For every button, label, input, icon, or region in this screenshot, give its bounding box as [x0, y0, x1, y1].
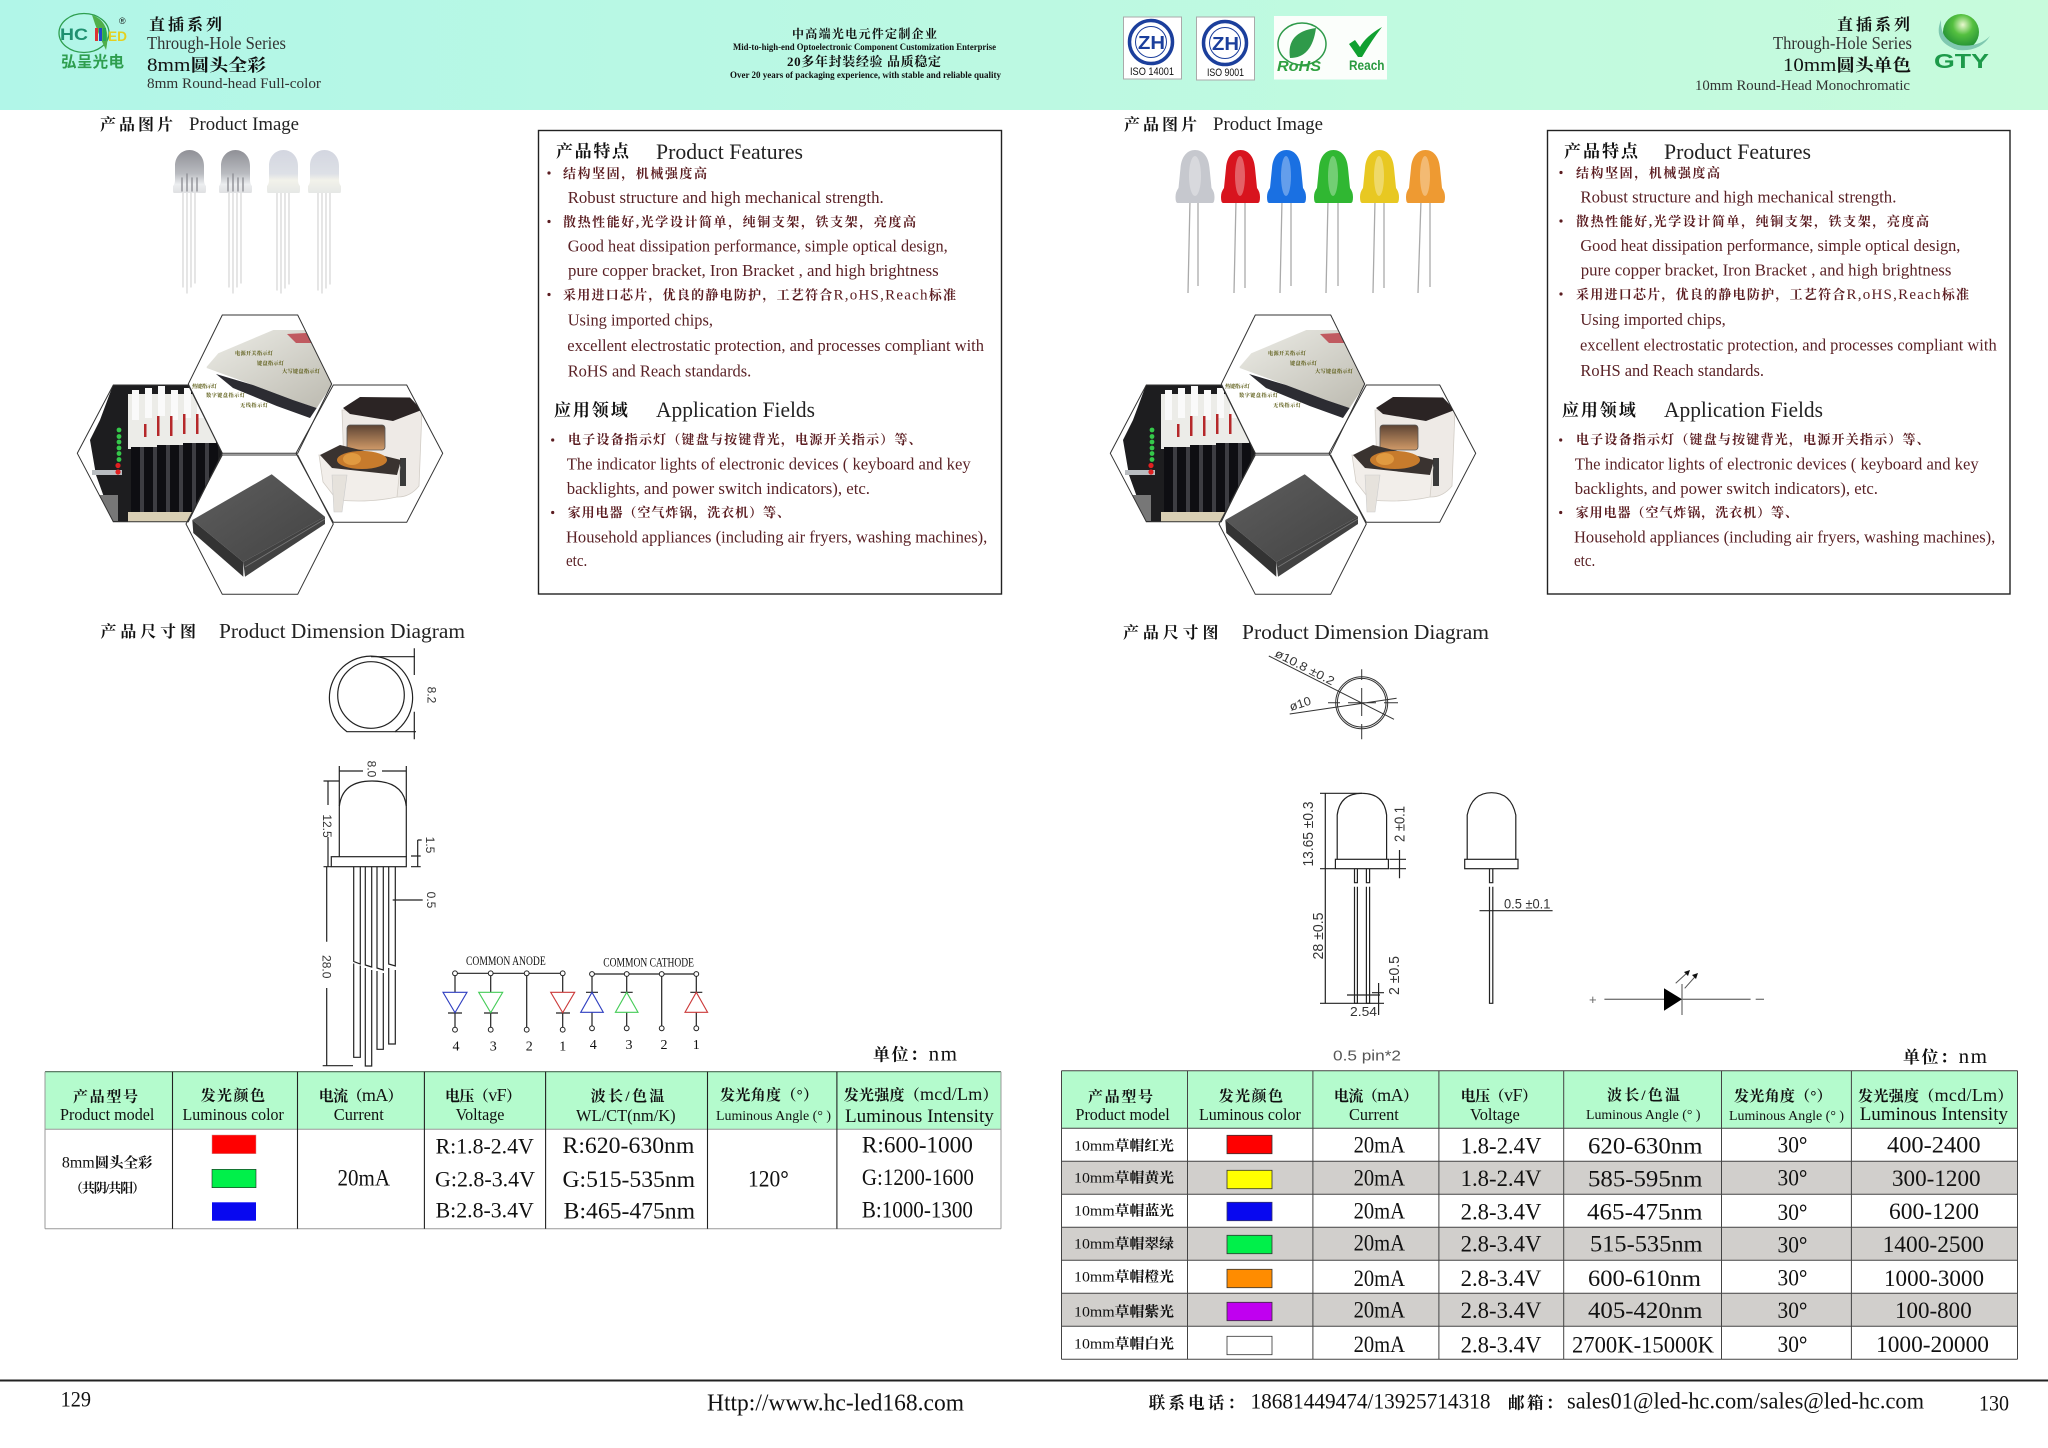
- icon: RoHS and Reach marks: Reach: [1349, 57, 1384, 73]
- icon: ISO 9001 badge: ISO 9001: [1207, 67, 1244, 79]
- table header row: 发光角度（°）: [1734, 1087, 1832, 1105]
- circuit diagram: common cathode: 4: [590, 1038, 597, 1053]
- company slogan: Mid-to-high-end Optoelectronic Component Customization Enterprise: [733, 43, 996, 53]
- row: blue: 600-1200: [1889, 1199, 1979, 1225]
- footer: contact details: 邮箱：: [1508, 1393, 1562, 1412]
- features list: pure copper bracket, Iron Bracket , and high brightness: [568, 261, 939, 280]
- side view: 12.5: [320, 814, 334, 838]
- application hexagon collage right: [1110, 315, 1476, 594]
- side view: 0.5 ±0.1: [1504, 895, 1551, 911]
- company slogan: 中高端光电元件定制企业: [792, 26, 937, 41]
- table header row: [1076, 1085, 2012, 1125]
- row: red: 620-630nm: [1588, 1133, 1702, 1159]
- features list: Robust structure and high mechanical strength.: [1580, 188, 1896, 206]
- footer: contact details: [1149, 1388, 1924, 1413]
- icon: ISO 14001 badge: ISO 14001: [1130, 66, 1174, 78]
- row: red: 400-2400: [1887, 1133, 1981, 1159]
- footer: website: Http://www.hc-led168.com: [707, 1391, 964, 1417]
- features heading: 产品特点: [1564, 141, 1639, 161]
- series title: 直插系列: [149, 15, 222, 34]
- front view: [1300, 793, 1408, 1019]
- device callout labels left: 大写键盘指示灯: [282, 367, 321, 375]
- applications list: 家用电器（空气炸锅，洗衣机）等、: [1576, 505, 1798, 521]
- side view: 8.0: [365, 761, 379, 778]
- icon: HC logo: ®: [119, 16, 126, 26]
- applications heading: [554, 397, 815, 422]
- row: blue: [1074, 1199, 1979, 1226]
- angle value: 120°: [748, 1167, 789, 1193]
- wavelength values: B:465-475nm: [564, 1198, 695, 1224]
- table header row: Luminous Intensity: [845, 1106, 994, 1127]
- table header row: 发光强度（mcd/Lm）: [1858, 1085, 2012, 1105]
- features list: [1559, 166, 1997, 380]
- heading: dimension diagram right: Product Dimension Diagram: [1242, 620, 1489, 644]
- table header row: Luminous Intensity: [1860, 1104, 2008, 1125]
- table header row: Luminous color: [182, 1105, 284, 1124]
- panel: features and applications right: [1548, 130, 2010, 594]
- features heading: 产品特点: [556, 141, 630, 161]
- features list: RoHS and Reach standards.: [1580, 361, 1764, 380]
- row: red: 1.8-2.4V: [1461, 1133, 1542, 1158]
- row: red: 20mA: [1354, 1133, 1405, 1158]
- row: yellow: 585-595nm: [1588, 1166, 1702, 1192]
- footer rule: [0, 1380, 2048, 1382]
- front view: 13.65 ±0.3: [1300, 802, 1317, 866]
- row: white: 2.8-3.4V: [1461, 1332, 1542, 1357]
- features list: 结构坚固，机械强度高: [563, 166, 707, 182]
- table header row: 波长/色温: [591, 1087, 664, 1105]
- intensity values: B:1000-1300: [862, 1198, 973, 1223]
- right page header: [1124, 14, 1990, 94]
- left page header: [59, 14, 1001, 92]
- icon: HC logo: HC: [60, 25, 88, 44]
- features heading: Product Features: [656, 139, 803, 164]
- table: 8mm full-colour specs: [45, 1072, 1001, 1229]
- table header row: 发光颜色: [1219, 1087, 1283, 1105]
- circuit diagram: common cathode: [581, 955, 708, 1053]
- row: blue: 30°: [1778, 1200, 1808, 1226]
- heading: product image left: 产品图片: [100, 115, 173, 134]
- product model: 8mm圆头全彩: [62, 1154, 152, 1171]
- row: red: [1074, 1133, 1981, 1159]
- row: purple: [1074, 1298, 1972, 1324]
- table header row: Current: [334, 1105, 384, 1124]
- series title: [1695, 15, 1912, 94]
- company slogan: [730, 26, 1001, 81]
- unit label right: 单位：nm: [1903, 1044, 1987, 1068]
- row: white: 2700K-15000K: [1572, 1332, 1714, 1358]
- table header row: 产品型号: [73, 1088, 138, 1106]
- circuit diagram: common cathode: COMMON CATHODE: [603, 955, 694, 970]
- intensity values: R:600-1000: [862, 1133, 973, 1158]
- current value: 20mA: [338, 1166, 390, 1191]
- hexagon: air fryer: [296, 385, 443, 522]
- applications list: [551, 432, 987, 570]
- table header row: 发光强度（mcd/Lm）: [844, 1084, 998, 1104]
- table header row: Luminous color: [1199, 1105, 1301, 1124]
- row: white: 1000-20000: [1876, 1332, 1989, 1358]
- row: yellow: 300-1200: [1892, 1166, 1981, 1192]
- table header row: 发光角度（°）: [720, 1086, 818, 1104]
- table header row: Luminous Angle (° ): [1729, 1108, 1844, 1123]
- series title: 10mm Round-Head Monochromatic: [1695, 78, 1910, 94]
- row: orange: 2.8-3.4V: [1461, 1266, 1542, 1291]
- applications list: 电子设备指示灯（键盘与按键背光，电源开关指示）等、: [568, 432, 922, 448]
- dimension drawing: 8mm LED: [320, 648, 439, 1066]
- device callout labels left: 热键指示灯: [192, 382, 218, 390]
- row: orange: [1074, 1266, 1984, 1292]
- icon: HC logo: 弘呈光电: [61, 53, 124, 71]
- applications heading: Application Fields: [1664, 397, 1823, 422]
- icon: RoHS and Reach marks: RoHS: [1277, 58, 1321, 75]
- row: orange: 600-610nm: [1588, 1266, 1701, 1292]
- applications heading: [1562, 397, 1823, 422]
- applications list: etc.: [1574, 551, 1595, 570]
- row: blue: 2.8-3.4V: [1461, 1199, 1542, 1224]
- top view: ø10.8 ±0.2: [1273, 646, 1337, 688]
- device callout labels right: 数字键盘指示灯: [1239, 391, 1279, 399]
- row: emerald green: [1074, 1231, 1984, 1258]
- row: white: 10mm草帽白光: [1074, 1335, 1174, 1352]
- device callout labels left: 数字键盘指示灯: [206, 391, 246, 399]
- features list: [547, 166, 984, 380]
- footer: page number 129: 129: [61, 1387, 91, 1412]
- device callout labels right: [1225, 349, 1354, 409]
- series title: 8mm Round-head Full-color: [147, 76, 321, 92]
- table header row: 电流（mA）: [1334, 1085, 1418, 1105]
- header band: [0, 0, 2048, 110]
- row: yellow: 10mm草帽黄光: [1074, 1170, 1174, 1187]
- table header row: Voltage: [1470, 1105, 1520, 1124]
- row: blue: 10mm草帽蓝光: [1074, 1203, 1174, 1220]
- applications list: 电子设备指示灯（键盘与按键背光，电源开关指示）等、: [1576, 432, 1930, 448]
- circuit diagram: common anode: 2: [526, 1040, 533, 1055]
- features list: pure copper bracket, Iron Bracket , and high brightness: [1581, 260, 1951, 280]
- side view: 0.5: [424, 892, 438, 909]
- circuit diagram: common anode: [443, 953, 575, 1055]
- dimension drawing: 10mm LED: [1269, 646, 1553, 1065]
- features list: excellent electrostatic protection, and processes compliant with: [1580, 336, 1997, 354]
- applications list: Household appliances (including air fryers, washing machines),: [566, 527, 987, 546]
- applications list: [1559, 432, 1995, 570]
- circuit diagram: common anode: 1: [559, 1040, 566, 1055]
- side view: [320, 761, 438, 1066]
- hexagon: server rack: [77, 385, 224, 522]
- table header row: Luminous Angle (° ): [1586, 1107, 1700, 1122]
- features list: Using imported chips,: [1580, 310, 1726, 329]
- heading: dimension diagram left: 产品尺寸图: [100, 622, 196, 641]
- icon: RoHS and Reach marks: [1274, 16, 1387, 80]
- row: emerald green: 2.8-3.4V: [1461, 1232, 1542, 1256]
- footer: contact details: 18681449474/13925714318: [1250, 1388, 1490, 1413]
- photo: four RGB LEDs: [173, 150, 341, 293]
- row: orange: 1000-3000: [1884, 1266, 1984, 1292]
- hexagon: dark box: [186, 455, 333, 594]
- row: blue: 465-475nm: [1587, 1199, 1702, 1225]
- heading: product image left: Product Image: [189, 115, 299, 135]
- row: purple: 100-800: [1895, 1298, 1972, 1324]
- row: orange: 30°: [1778, 1266, 1808, 1292]
- row: orange: 10mm草帽橙光: [1074, 1268, 1174, 1285]
- device callout labels left: 无线指示灯: [240, 401, 269, 409]
- table: 10mm monochrome specs: [1062, 1071, 2018, 1359]
- applications list: etc.: [566, 551, 587, 570]
- features list: excellent electrostatic protection, and processes compliant with: [567, 336, 984, 355]
- heading: product image right: 产品图片: [1124, 115, 1197, 134]
- features list: Good heat dissipation performance, simple optical design,: [1580, 236, 1960, 255]
- features list: RoHS and Reach standards.: [568, 362, 751, 380]
- applications list: 家用电器（空气炸锅，洗衣机）等、: [568, 505, 790, 521]
- table header row: 电压（vF）: [445, 1085, 521, 1105]
- applications list: The indicator lights of electronic devices ( keyboard and key: [1575, 454, 1979, 473]
- series title: 8mm 圆头全彩: [147, 55, 266, 76]
- company slogan: 20多年封装经验 品质稳定: [787, 54, 941, 69]
- front view: 2 ±0.5: [1386, 956, 1403, 995]
- table header row: Current: [1349, 1105, 1399, 1124]
- table header row: Product model: [60, 1105, 155, 1124]
- voltage values: B:2.8-3.4V: [436, 1198, 534, 1223]
- row: purple: 10mm草帽紫光: [1074, 1303, 1174, 1320]
- colour swatches: [212, 1135, 256, 1221]
- table header row: Product model: [1076, 1105, 1170, 1124]
- features list: 散热性能好,光学设计简单，纯铜支架，铁支架，亮度高: [563, 214, 916, 230]
- table header row: 发光颜色: [201, 1086, 265, 1104]
- heading: dimension diagram left: Product Dimension Diagram: [219, 619, 465, 643]
- device callout labels right: 热键指示灯: [1225, 382, 1251, 390]
- row: white: 20mA: [1354, 1332, 1405, 1357]
- row: emerald green: 515-535nm: [1590, 1232, 1702, 1258]
- voltage values: R:1.8-2.4V: [436, 1133, 534, 1158]
- side view: [1465, 793, 1553, 1003]
- row: white: 30°: [1778, 1332, 1808, 1358]
- circuit diagram: common cathode: 1: [693, 1038, 700, 1053]
- applications list: The indicator lights of electronic devices ( keyboard and key: [567, 454, 971, 473]
- icon: HC logo: ED: [108, 28, 127, 44]
- row: red: 10mm草帽红光: [1074, 1138, 1174, 1155]
- table header row: [60, 1084, 998, 1127]
- LED schematic symbol: +: [1589, 992, 1597, 1007]
- series title: 10mm 圆头单色: [1783, 55, 1911, 76]
- heading: dimension diagram right: [1123, 620, 1489, 644]
- table header row: 电压（vF）: [1461, 1085, 1537, 1105]
- circuit diagram: common anode: 3: [490, 1040, 497, 1055]
- heading: dimension diagram left: [100, 619, 465, 643]
- table header row: 产品型号: [1088, 1088, 1153, 1106]
- features list: 采用进口芯片，优良的静电防护，工艺符合R,oHS,Reach标准: [563, 288, 956, 304]
- applications list: backlights, and power switch indicators), etc.: [567, 479, 870, 498]
- footer: contact details: 联系电话：: [1149, 1392, 1244, 1412]
- product model: [62, 1154, 152, 1196]
- voltage values: [435, 1133, 535, 1223]
- panel: features and applications left: [538, 130, 1002, 594]
- features heading: Product Features: [1664, 139, 1811, 164]
- row: emerald green: 1400-2500: [1883, 1232, 1984, 1258]
- device callout labels right: 大写键盘指示灯: [1315, 367, 1354, 375]
- circuit diagram: common cathode: 3: [626, 1038, 632, 1053]
- icon: ISO 14001 badge: ZH: [1138, 33, 1165, 53]
- table header row: 电流（mA）: [319, 1085, 402, 1105]
- device callout labels right: 键盘指示灯: [1290, 359, 1318, 367]
- top view: [329, 648, 439, 739]
- applications list: Household appliances (including air fryers, washing machines),: [1574, 527, 1995, 546]
- top view: 8.2: [425, 687, 439, 704]
- features list: 散热性能好,光学设计简单，纯铜支架，铁支架，亮度高: [1576, 214, 1929, 230]
- unit label left: 单位：nm: [873, 1042, 957, 1066]
- row: red: 30°: [1778, 1133, 1808, 1159]
- features heading: [556, 139, 803, 164]
- photo: six coloured LEDs: [1176, 150, 1445, 293]
- row: yellow: [1074, 1166, 1981, 1192]
- heading: product image left: [100, 115, 299, 135]
- product model: （共阴/共阳）: [70, 1181, 145, 1196]
- features list: 结构坚固，机械强度高: [1576, 166, 1720, 182]
- applications heading: 应用领域: [1562, 400, 1636, 420]
- icon: GTY logo: GTY: [1934, 51, 1990, 73]
- series title: [147, 15, 321, 92]
- intensity values: G:1200-1600: [862, 1165, 974, 1190]
- series title: Through-Hole Series: [1773, 33, 1912, 53]
- features heading: [1564, 139, 1811, 164]
- icon: GTY logo: [1934, 14, 1990, 73]
- applications heading: 应用领域: [554, 400, 628, 420]
- front view: 2.54: [1350, 1004, 1377, 1019]
- series title: Through-Hole Series: [147, 33, 286, 53]
- table header row: Luminous Angle (° ): [716, 1108, 831, 1123]
- row: emerald green: 10mm草帽翠绿: [1074, 1235, 1174, 1252]
- row: purple: 20mA: [1354, 1298, 1405, 1323]
- LED schematic symbol: [1589, 970, 1764, 1015]
- intensity values: [862, 1133, 974, 1223]
- voltage values: G:2.8-3.4V: [435, 1167, 535, 1192]
- row: white: [1074, 1332, 1989, 1358]
- heading: dimension diagram right: 产品尺寸图: [1123, 623, 1218, 642]
- front view: 28 ±0.5: [1310, 912, 1327, 960]
- table header row: 波长/色温: [1607, 1086, 1680, 1104]
- icon: HC logo: [59, 14, 127, 71]
- side view: 1.5: [423, 837, 437, 854]
- row: yellow: 20mA: [1354, 1166, 1405, 1191]
- wavelength values: R:620-630nm: [562, 1133, 694, 1159]
- wavelength values: G:515-535nm: [562, 1167, 695, 1193]
- device callout labels left: [192, 349, 321, 409]
- hexagon: network device: [188, 315, 333, 453]
- icon: ISO 9001 badge: ZH: [1212, 34, 1239, 54]
- company slogan: Over 20 years of packaging experience, with stable and reliable quality: [730, 71, 1001, 81]
- row: orange: 20mA: [1354, 1266, 1405, 1291]
- pin note: 0.5 pin*2: [1333, 1049, 1401, 1065]
- series title: 直插系列: [1837, 15, 1910, 34]
- features list: Good heat dissipation performance, simple optical design,: [568, 236, 948, 256]
- footer: page number 130: 130: [1979, 1391, 2009, 1416]
- row: yellow: 1.8-2.4V: [1461, 1166, 1542, 1191]
- features list: Using imported chips,: [568, 310, 713, 330]
- device callout labels right: 电源开关指示灯: [1268, 349, 1307, 357]
- applications list: backlights, and power switch indicators), etc.: [1575, 479, 1878, 498]
- row: purple: 30°: [1778, 1298, 1808, 1324]
- circuit diagram: common anode: COMMON ANODE: [466, 953, 546, 968]
- circuit diagram: common anode: 4: [452, 1040, 460, 1055]
- row: yellow: 30°: [1778, 1166, 1808, 1192]
- row: purple: 405-420nm: [1588, 1298, 1702, 1324]
- table header row: WL/CT(nm/K): [576, 1106, 676, 1125]
- applications heading: Application Fields: [656, 397, 815, 422]
- row: purple: 2.8-3.4V: [1461, 1298, 1542, 1323]
- device callout labels right: 无线指示灯: [1273, 401, 1302, 409]
- heading: product image right: [1124, 115, 1323, 135]
- features list: Robust structure and high mechanical strength.: [568, 188, 884, 207]
- device callout labels left: 电源开关指示灯: [235, 349, 274, 357]
- application hexagon collage left: [77, 315, 443, 594]
- circuit diagram: common cathode: 2: [660, 1038, 668, 1053]
- table header row: Voltage: [456, 1105, 504, 1124]
- top view: [1269, 646, 1398, 739]
- icon: ISO 9001 badge: [1196, 17, 1254, 80]
- heading: product image right: Product Image: [1213, 115, 1323, 135]
- row: emerald green: 20mA: [1354, 1231, 1405, 1256]
- footer: contact details: sales01@led-hc.com/sales@led-hc.com: [1567, 1388, 1924, 1413]
- front view: 2 ±0.1: [1392, 806, 1408, 842]
- wavelength values: [562, 1133, 695, 1224]
- row: emerald green: 30°: [1778, 1232, 1808, 1258]
- icon: ISO 14001 badge: [1124, 17, 1182, 79]
- row: blue: 20mA: [1354, 1199, 1405, 1224]
- side view: 28.0: [320, 955, 334, 979]
- features list: 采用进口芯片，优良的静电防护，工艺符合R,oHS,Reach标准: [1576, 287, 1969, 303]
- top view: ø10: [1288, 694, 1313, 714]
- device callout labels left: 键盘指示灯: [257, 359, 285, 367]
